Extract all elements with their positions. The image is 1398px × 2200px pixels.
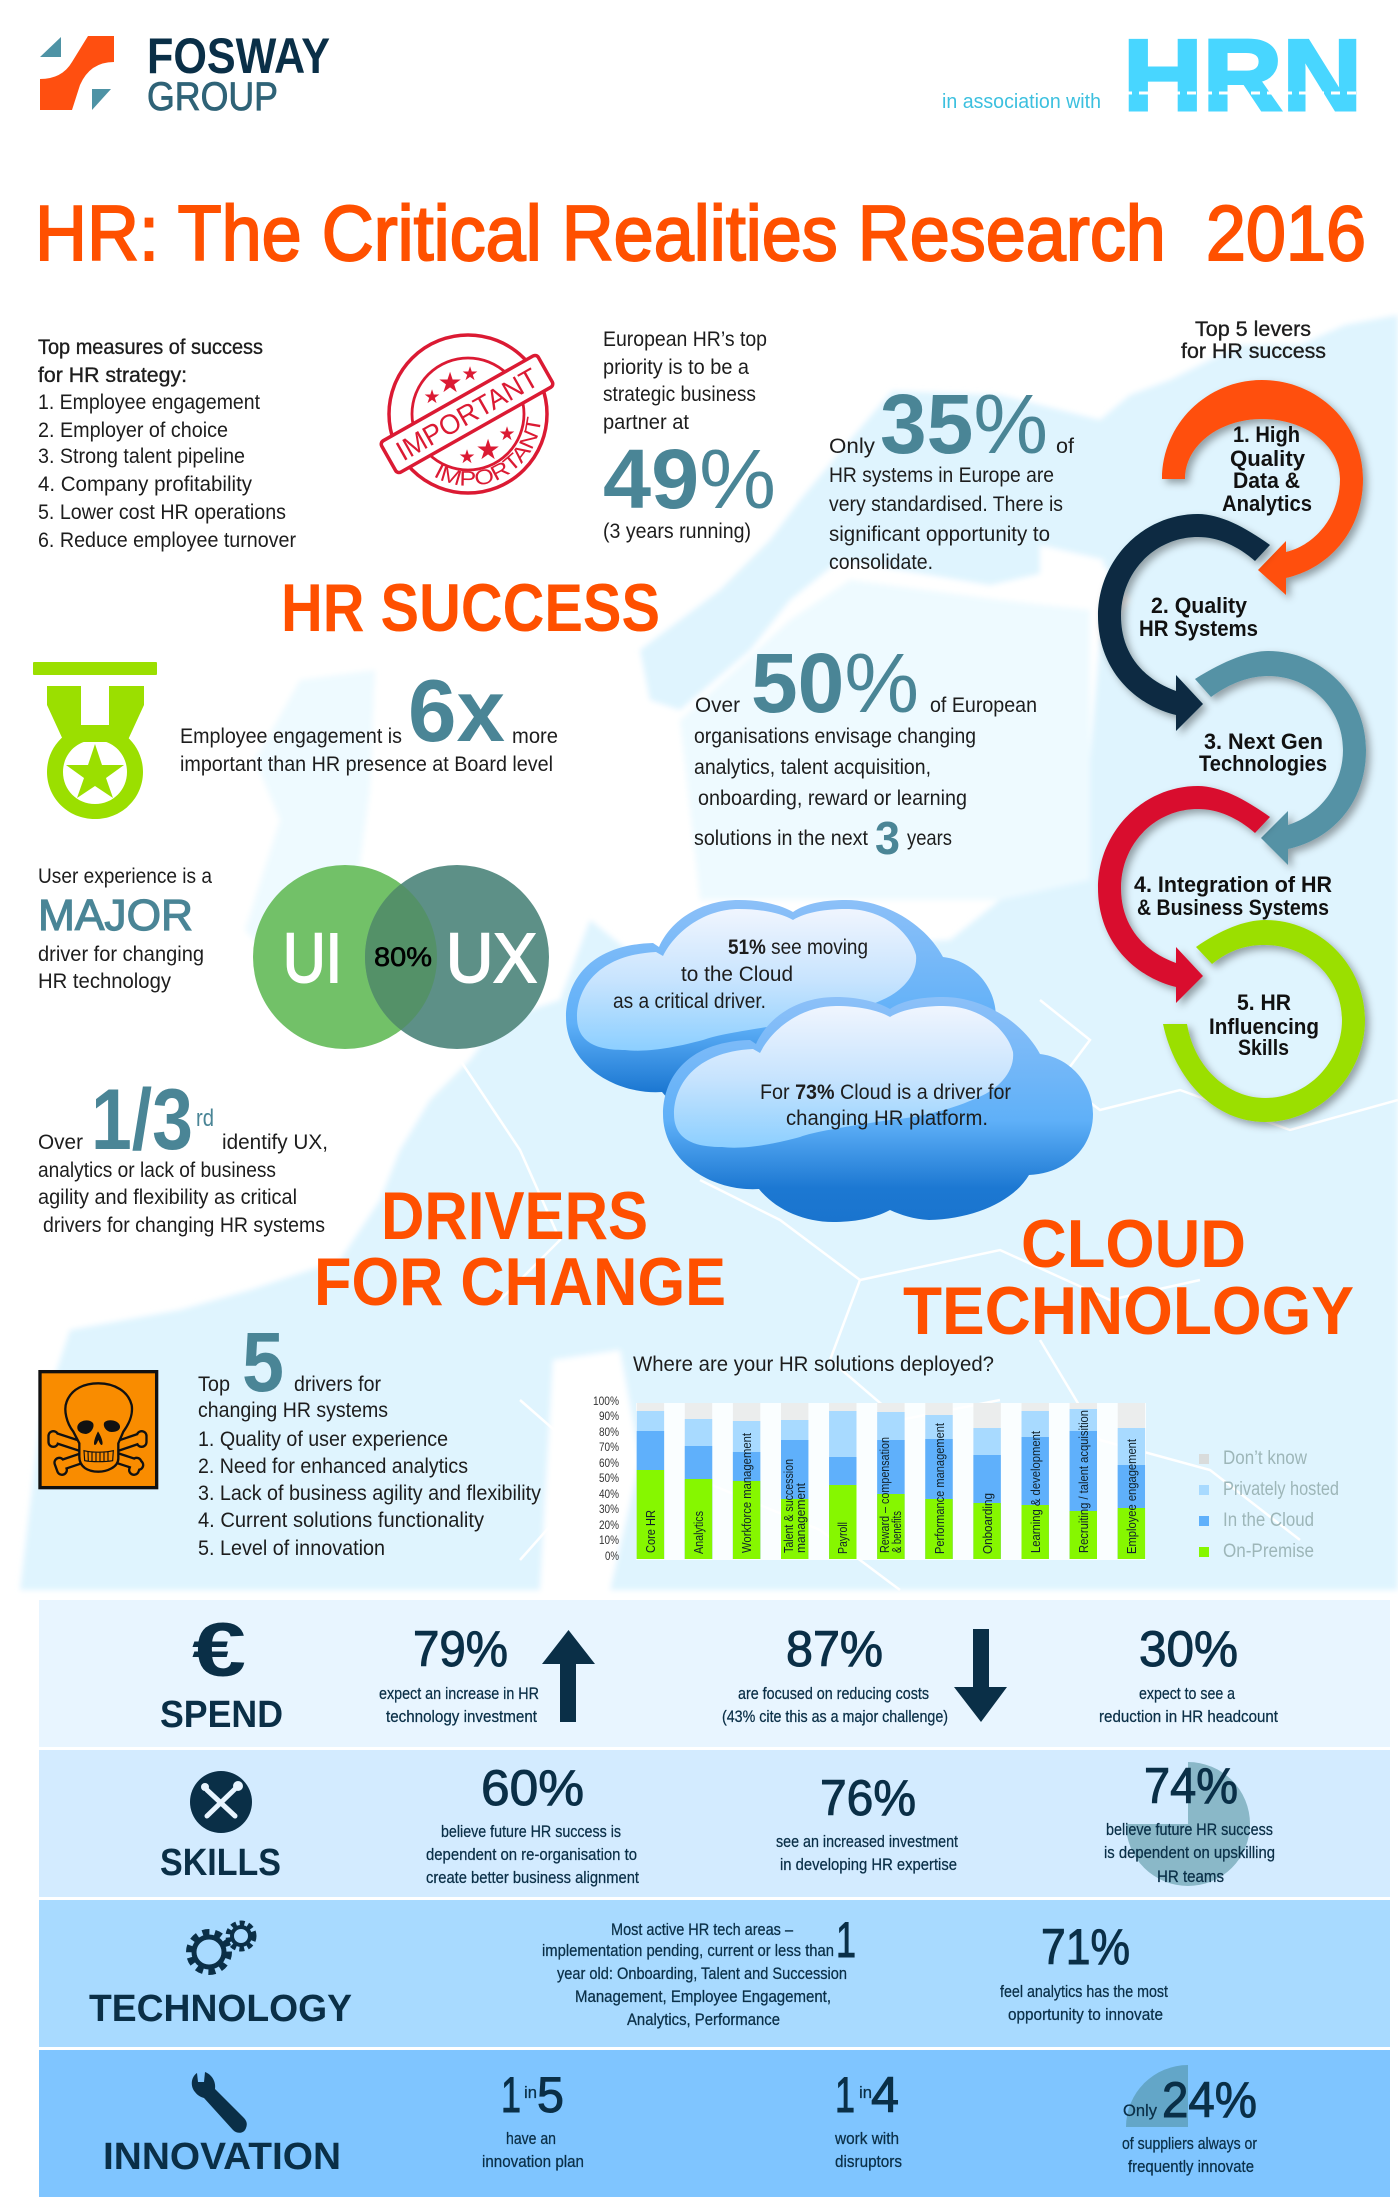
stat: 60%: 60% — [481, 1760, 584, 1816]
panel: skills — [39, 1750, 1390, 1897]
stat: 35% standardised HR systems: Only — [829, 435, 876, 458]
text block: top 5 drivers: 4. Current solutions functionality — [198, 1509, 484, 1532]
stat: 30%: expect to see a — [1139, 1685, 1236, 1703]
logo: Fosway Group: GROUP — [147, 75, 278, 119]
icon: important stamp: ★ — [498, 423, 516, 445]
icon: hazard skull sign — [40, 1372, 157, 1488]
axis labels: 50% — [599, 1471, 619, 1485]
stat: 60%: dependent on re-organisation to — [426, 1846, 637, 1864]
stat: 35% standardised HR systems: consolidate. — [829, 551, 933, 574]
cloud: 73% Cloud driver — [663, 997, 1093, 1222]
text block: top measures of success: 5. Lower cost HR operations — [38, 501, 286, 524]
venn diagram: UI and UX: UX — [446, 919, 537, 997]
stat: 76%: 76% — [820, 1770, 916, 1826]
stat: only 24%: frequently innovate — [1128, 2158, 1254, 2176]
stat: 35% standardised HR systems: significant opportunity to — [829, 523, 1050, 546]
chart legend: On-Premise — [1223, 1541, 1314, 1562]
bar: Payroll: Payroll — [835, 1522, 850, 1554]
stat: 35% standardised HR systems: HR systems in Europe are — [829, 464, 1054, 487]
icon: important stamp: IMPORTANT — [435, 416, 540, 486]
bar: Core HR — [637, 1403, 664, 1559]
stat: 79%: 79% — [413, 1621, 508, 1677]
stat: over 50% envisage changing: Over — [695, 694, 740, 717]
bar: Employee engagement — [1118, 1403, 1145, 1559]
stat: 1 in 4: 4 — [871, 2067, 899, 2123]
axis labels: 40% — [599, 1487, 619, 1501]
stat: 87%: (43% cite this as a major challenge) — [722, 1708, 948, 1726]
lever labels: Quality — [1230, 446, 1306, 471]
stat: 74%: HR teams — [1157, 1868, 1224, 1886]
pie: 24% — [1126, 2065, 1188, 2127]
label: skills: SKILLS — [160, 1842, 281, 1884]
lever labels: 3. Next Gen — [1204, 729, 1323, 754]
stat: 60%: believe future HR success is — [441, 1823, 621, 1841]
panel: spend — [39, 1600, 1390, 1747]
stat: 71%: 71% — [1041, 1919, 1130, 1975]
axis labels: 0% — [605, 1549, 619, 1563]
bar: Learning & development — [1022, 1403, 1049, 1559]
icon: important stamp: ★ — [423, 386, 441, 408]
text block: top 5 drivers: 2. Need for enhanced analytics — [198, 1455, 468, 1478]
stat: 76% — [776, 1770, 958, 1874]
cloud: 73% Cloud driver: For 73% Cloud is a driver for — [760, 1081, 1011, 1104]
heading: drivers for change — [314, 1178, 726, 1320]
text block: top 5 drivers: changing HR systems — [198, 1399, 388, 1422]
axis labels: 80% — [599, 1425, 619, 1439]
stat: 87%: are focused on reducing costs — [738, 1685, 929, 1703]
bar: Workforce management: Workforce management — [739, 1433, 754, 1553]
bar: Reward, compensation & benefits — [877, 1403, 905, 1559]
stat: 49% strategic business partner: partner at — [603, 411, 689, 434]
axis labels: 100% — [593, 1394, 619, 1408]
text block: top measures of success: for HR strategy: — [38, 364, 187, 387]
lever labels: & Business Systems — [1137, 895, 1329, 920]
bar: Recruiting / talent acquisition — [1070, 1403, 1097, 1559]
text block: top measures of success: 6. Reduce employee turnover — [38, 529, 296, 552]
stat: 74%: believe future HR success — [1106, 1821, 1273, 1839]
stat: over 50% envisage changing: analytics, talent acquisition, — [694, 756, 931, 779]
stat: 30% — [1099, 1621, 1278, 1726]
logo: Fosway Group — [40, 28, 330, 119]
stat: 1 in 5 — [482, 2067, 584, 2171]
bar: Core HR: Core HR — [643, 1510, 658, 1553]
heading: top 5 levers — [1181, 318, 1326, 363]
text block: top 5 drivers: Top — [198, 1373, 230, 1396]
arrow: up — [542, 1630, 595, 1722]
stat: 1 in 5: have an — [506, 2130, 556, 2148]
stat: 79%: technology investment — [386, 1708, 537, 1726]
stat: 6x employee engagement: Employee engagement is — [180, 725, 402, 748]
icon: important stamp: ★ — [437, 366, 463, 399]
icon: important stamp: ★ — [458, 446, 476, 468]
arrow 4: red lever — [1098, 786, 1270, 1003]
text block: top measures of success — [38, 336, 296, 552]
stat: over 1/3rd identify UX: drivers for changing HR systems — [43, 1214, 325, 1237]
stat: 6x employee engagement: 6x — [408, 661, 505, 760]
association label and HRN logo — [942, 20, 1362, 132]
association label and HRN logo: in association with — [942, 91, 1101, 113]
stat: 76%: in developing HR expertise — [780, 1856, 957, 1874]
cloud: 73% Cloud driver: changing HR platform. — [786, 1107, 988, 1130]
stat: over 1/3rd identify UX: 1/3 — [91, 1072, 193, 1168]
icon: important stamp: IMPORTANT — [391, 362, 544, 467]
text block: top 5 drivers: 1. Quality of user experience — [198, 1428, 448, 1451]
stat: 49% strategic business partner: European HR’s top — [603, 328, 767, 351]
text block: user experience major driver: HR technology — [38, 970, 171, 993]
stat: 71%: feel analytics has the most — [1000, 1983, 1168, 2001]
bar: Performance management: Performance management — [932, 1423, 947, 1554]
text block: top measures of success: 3. Strong talent pipeline — [38, 445, 245, 468]
text block: most active HR tech areas — [542, 1912, 856, 2029]
stat: 1 in 5: 5 — [537, 2067, 564, 2123]
stat: 1 in 5: innovation plan — [482, 2153, 584, 2171]
stat: 1 in 5: in — [524, 2084, 537, 2102]
stat: over 1/3rd identify UX: agility and flexibility as critical — [38, 1186, 297, 1209]
chart legend — [1199, 1448, 1339, 1562]
bar: Talent & succession management: Talent & succession — [781, 1459, 796, 1553]
stat: 6x employee engagement: more — [512, 725, 558, 748]
logo: Fosway Group: FOSWAY — [147, 28, 330, 84]
bar: Performance management — [925, 1403, 953, 1559]
bar: Onboarding: Onboarding — [980, 1493, 995, 1554]
stat: over 1/3rd identify UX: Over — [38, 1131, 83, 1154]
stat: 49% strategic business partner: priority is to be a — [603, 356, 749, 379]
icon: important stamp: ★ — [461, 363, 479, 385]
text block: most active HR tech areas: implementation pending, current or less than — [542, 1942, 834, 1960]
stat: 74% — [1104, 1758, 1275, 1886]
cloud: 51% moving to the Cloud — [566, 900, 996, 1125]
stat: only 24%: of suppliers always or — [1122, 2135, 1257, 2153]
stat: 35% standardised HR systems — [829, 377, 1074, 574]
stat: 1 in 5: 1 — [501, 2067, 521, 2123]
lever labels: 5. HR — [1237, 990, 1291, 1015]
bar: Reward, compensation & benefits: Reward – compensation — [877, 1437, 892, 1553]
text block: top 5 drivers: drivers for — [294, 1373, 381, 1396]
stat: 30%: 30% — [1139, 1621, 1238, 1677]
text block: user experience major driver: User experience is a — [38, 865, 212, 888]
chart title: Where are your HR solutions deployed? — [633, 1353, 994, 1376]
chart legend: In the Cloud — [1223, 1510, 1314, 1531]
axis labels — [593, 1394, 619, 1563]
icon: important stamp — [380, 333, 554, 495]
text block: top measures of success: 2. Employer of choice — [38, 419, 228, 442]
lever labels: 1. High — [1233, 422, 1300, 447]
text block: most active HR tech areas: Analytics, Performance — [627, 2011, 780, 2029]
bar: Employee engagement: Employee engagement — [1124, 1439, 1139, 1554]
axis labels: 30% — [599, 1502, 619, 1516]
bar: Talent & succession management — [781, 1403, 808, 1559]
venn diagram: UI and UX: UI — [283, 919, 342, 997]
stat: 74%: is dependent on upskilling — [1104, 1844, 1275, 1862]
stat: 6x employee engagement: important than HR presence at Board level — [180, 753, 553, 776]
axis labels: 10% — [599, 1533, 619, 1547]
stat: over 50% envisage changing: organisations envisage changing — [694, 725, 976, 748]
panel: technology — [39, 1900, 1390, 2047]
text block: top 5 drivers: 3. Lack of business agility and flexibility — [198, 1482, 541, 1505]
bar: Recruiting / talent acquisition: Recruiting / talent acquisition — [1076, 1410, 1091, 1553]
axis labels: 60% — [599, 1456, 619, 1470]
cloud: 51% moving to the Cloud: to the Cloud — [681, 963, 793, 986]
stat: 1 in 4: 1 — [835, 2067, 855, 2123]
stat: 71% — [1000, 1919, 1168, 2024]
stat: 49% strategic business partner — [603, 328, 776, 543]
arrow 1: orange lever — [1162, 380, 1363, 595]
icon: medal — [33, 662, 157, 819]
stat: 30%: reduction in HR headcount — [1099, 1708, 1278, 1726]
stat: over 1/3rd identify UX — [38, 1072, 328, 1237]
text block: top measures of success: Top measures of success — [38, 336, 263, 359]
lever labels: HR Systems — [1139, 616, 1258, 641]
heading: cloud technology: CLOUD — [1021, 1206, 1246, 1282]
lever labels: Data & — [1233, 468, 1300, 493]
bar: Workforce management — [733, 1403, 760, 1559]
stat: only 24%: 24% — [1162, 2072, 1257, 2128]
stat: 1 in 4 — [834, 2067, 902, 2171]
heading: drivers for change: FOR CHANGE — [314, 1244, 726, 1320]
chart legend: Privately hosted — [1223, 1479, 1339, 1500]
stacked bar chart: HR solution deployment — [593, 1394, 1146, 1563]
bar: Reward, compensation & benefits: & benefits — [889, 1511, 904, 1553]
text block: user experience major driver: MAJOR — [38, 891, 193, 940]
heading: top 5 levers: Top 5 levers — [1195, 318, 1311, 341]
stat: 49% strategic business partner: strategic business — [603, 383, 756, 406]
stat: 1 in 4: in — [859, 2084, 872, 2102]
chart legend: Don’t know — [1223, 1448, 1307, 1469]
heading: drivers for change: DRIVERS — [381, 1178, 648, 1254]
bar: Learning & development: Learning & development — [1028, 1431, 1043, 1553]
stat: over 50% envisage changing: 3 — [875, 812, 900, 864]
axis labels: 70% — [599, 1440, 619, 1454]
stat: over 50% envisage changing: solutions in the next — [694, 827, 868, 850]
text block: user experience major driver: driver for changing — [38, 943, 204, 966]
lever labels: Analytics — [1222, 491, 1312, 516]
arrow 5: green lever — [1163, 920, 1365, 1122]
lever labels: Technologies — [1199, 751, 1327, 776]
label: innovation: INNOVATION — [103, 2136, 341, 2178]
stat: over 50% envisage changing: 50% — [751, 636, 919, 730]
association label and HRN logo: HRN — [1123, 20, 1362, 132]
icon: wrench — [192, 2072, 247, 2133]
stat: over 1/3rd identify UX: analytics or lack of business — [38, 1159, 276, 1182]
stat: 6x employee engagement — [180, 661, 558, 776]
stat: over 50% envisage changing: of European — [930, 694, 1037, 717]
bar: Analytics: Analytics — [691, 1511, 706, 1554]
text block: top 5 drivers: 5 — [242, 1315, 284, 1409]
arrow 2: navy lever — [1098, 514, 1270, 731]
stat: 1 in 4: work with — [834, 2130, 899, 2148]
venn diagram: UI and UX — [253, 865, 549, 1049]
stat: over 50% envisage changing: onboarding, reward or learning — [698, 787, 967, 810]
text block: most active HR tech areas: 1 — [836, 1912, 856, 1968]
bar: Payroll — [829, 1403, 856, 1559]
lever labels: 4. Integration of HR — [1134, 872, 1332, 897]
stat: 35% standardised HR systems: 35% — [880, 377, 1048, 471]
stat: only 24%: Only — [1123, 2102, 1158, 2120]
bar: Analytics — [685, 1403, 712, 1559]
stat: only 24% — [1122, 2072, 1257, 2176]
icon: important stamp: ★ — [475, 433, 501, 466]
axis labels: 20% — [599, 1518, 619, 1532]
label: technology: TECHNOLOGY — [89, 1988, 352, 2030]
text block: top 5 drivers: 5. Level of innovation — [198, 1537, 385, 1560]
bar: Talent & succession management: management — [793, 1483, 808, 1553]
heading: HR success: HR SUCCESS — [281, 570, 660, 646]
background map of Europe — [20, 315, 1398, 1590]
heading: cloud technology — [903, 1206, 1354, 1349]
text block: user experience major driver — [38, 865, 212, 993]
heading: top 5 levers: for HR success — [1181, 340, 1326, 363]
stat: 79%: expect an increase in HR — [379, 1685, 539, 1703]
cloud: 51% moving to the Cloud: as a critical driver. — [613, 990, 766, 1013]
stat: 60% — [426, 1760, 639, 1887]
stat: 87%: 87% — [786, 1621, 883, 1677]
venn diagram: UI and UX: 80% — [374, 942, 432, 972]
text block: top 5 drivers — [198, 1315, 541, 1560]
stat: 35% standardised HR systems: very standardised. There is — [829, 493, 1063, 516]
text block: most active HR tech areas: Management, Employee Engagement, — [575, 1988, 831, 2006]
arrow: down — [954, 1629, 1007, 1722]
stat: 74%: 74% — [1144, 1758, 1238, 1814]
cloud: 51% moving to the Cloud: 51% see moving — [728, 936, 868, 959]
text block: top measures of success: 4. Company profitability — [38, 473, 252, 496]
text block: top measures of success: 1. Employee engagement — [38, 391, 260, 414]
stat: 1 in 4: disruptors — [835, 2153, 902, 2171]
panel: innovation — [39, 2050, 1390, 2197]
stat: over 1/3rd identify UX: identify UX, — [222, 1131, 328, 1154]
stat: over 1/3rd identify UX: rd — [196, 1105, 214, 1132]
lever labels: Skills — [1238, 1035, 1289, 1060]
stat: over 50% envisage changing — [694, 636, 1037, 864]
stat: 79% — [379, 1621, 539, 1726]
text block: most active HR tech areas: Most active HR tech areas – — [611, 1921, 794, 1939]
icon: euro: € — [192, 1608, 246, 1693]
label: spend: SPEND — [160, 1694, 283, 1736]
stat: 49% strategic business partner: (3 years running) — [603, 520, 751, 543]
lever labels — [1134, 422, 1332, 1060]
arrow 3: teal lever — [1195, 651, 1366, 865]
lever labels: 2. Quality — [1151, 593, 1248, 618]
stat: 60%: create better business alignment — [426, 1869, 639, 1887]
axis labels: 90% — [599, 1409, 619, 1423]
bar: Onboarding — [973, 1403, 1001, 1559]
stat: 35% standardised HR systems: of — [1056, 435, 1074, 458]
text block: most active HR tech areas: year old: Onboarding, Talent and Succession — [557, 1965, 847, 1983]
stat: 49% strategic business partner: 49% — [603, 432, 776, 526]
stat: 71%: opportunity to innovate — [1008, 2006, 1163, 2024]
lever labels: Influencing — [1209, 1014, 1319, 1039]
stat: 87% — [722, 1621, 948, 1726]
stat: 76%: see an increased investment — [776, 1833, 958, 1851]
pie: 74% — [1126, 1762, 1250, 1886]
icon: crossed tools — [190, 1771, 252, 1833]
stat: over 50% envisage changing: years — [907, 827, 952, 850]
icon: gears — [189, 1923, 254, 1972]
heading: cloud technology: TECHNOLOGY — [903, 1273, 1354, 1349]
